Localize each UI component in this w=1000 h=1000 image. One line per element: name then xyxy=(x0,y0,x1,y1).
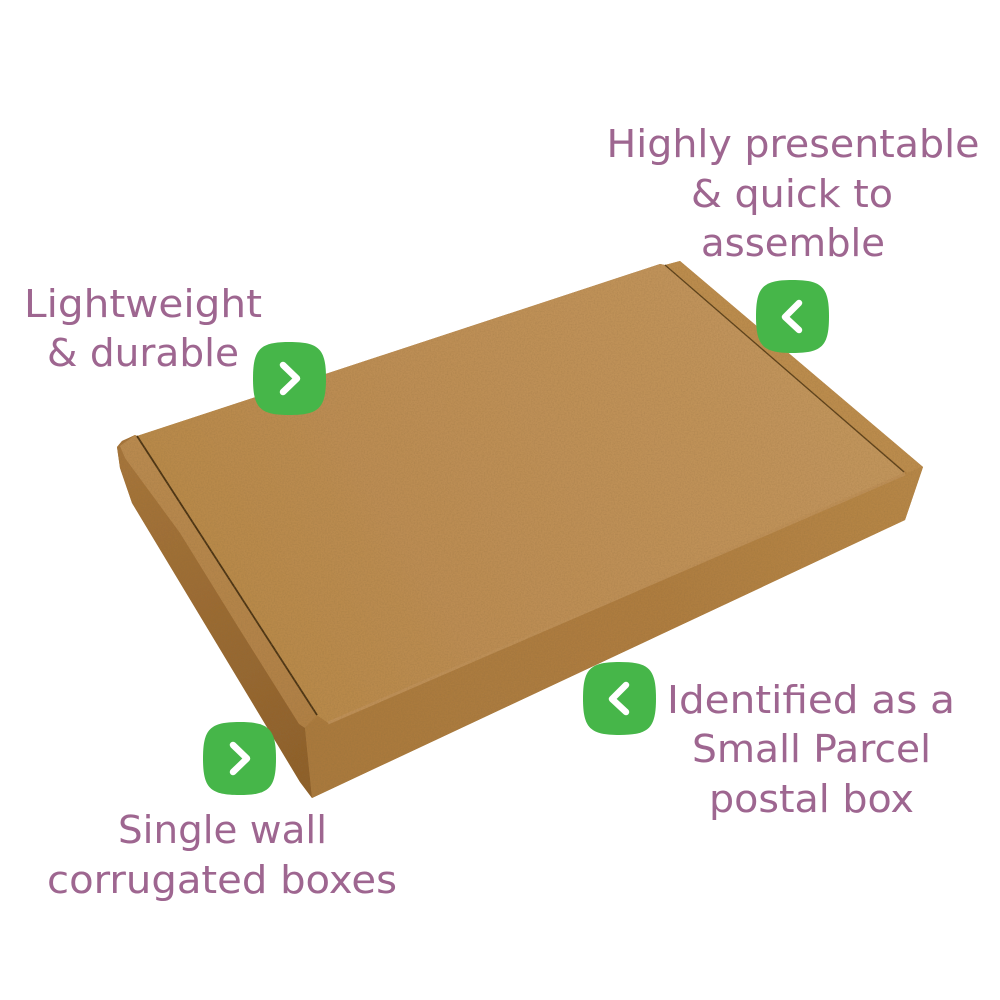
callout text xyxy=(606,122,980,265)
icon: right chevron badge xyxy=(253,342,326,415)
callout text: & quick to xyxy=(691,172,893,216)
callout: small parcel xyxy=(583,662,955,821)
box left flap xyxy=(120,435,317,728)
box front panel xyxy=(305,467,923,798)
callout text: postal box xyxy=(709,777,914,821)
callout: highly presentable xyxy=(606,122,980,353)
callout text: & durable xyxy=(47,331,239,375)
callout text: Single wall xyxy=(118,808,327,852)
front fold highlight xyxy=(328,474,905,723)
box silhouette base xyxy=(117,261,923,798)
box top panel xyxy=(137,264,905,723)
box left side wall xyxy=(117,435,317,798)
callout text: Highly presentable xyxy=(606,122,980,166)
callout: single wall xyxy=(47,722,397,902)
box right flap xyxy=(665,261,923,473)
right flap crease xyxy=(665,265,904,472)
icon: left chevron badge xyxy=(583,662,656,735)
cardboard box xyxy=(117,261,923,798)
callout text xyxy=(47,808,397,902)
icon: left chevron badge xyxy=(756,280,829,353)
callout text: assemble xyxy=(701,221,885,265)
callout text: corrugated boxes xyxy=(47,858,397,902)
callout text: Small Parcel xyxy=(692,727,931,771)
left flap crease xyxy=(137,436,317,715)
callout text xyxy=(667,678,955,821)
callout text xyxy=(24,282,262,375)
callout text: Lightweight xyxy=(24,282,262,326)
callout text: Identified as a xyxy=(667,678,955,722)
icon: right chevron badge xyxy=(203,722,276,795)
callout: lightweight xyxy=(24,282,326,415)
